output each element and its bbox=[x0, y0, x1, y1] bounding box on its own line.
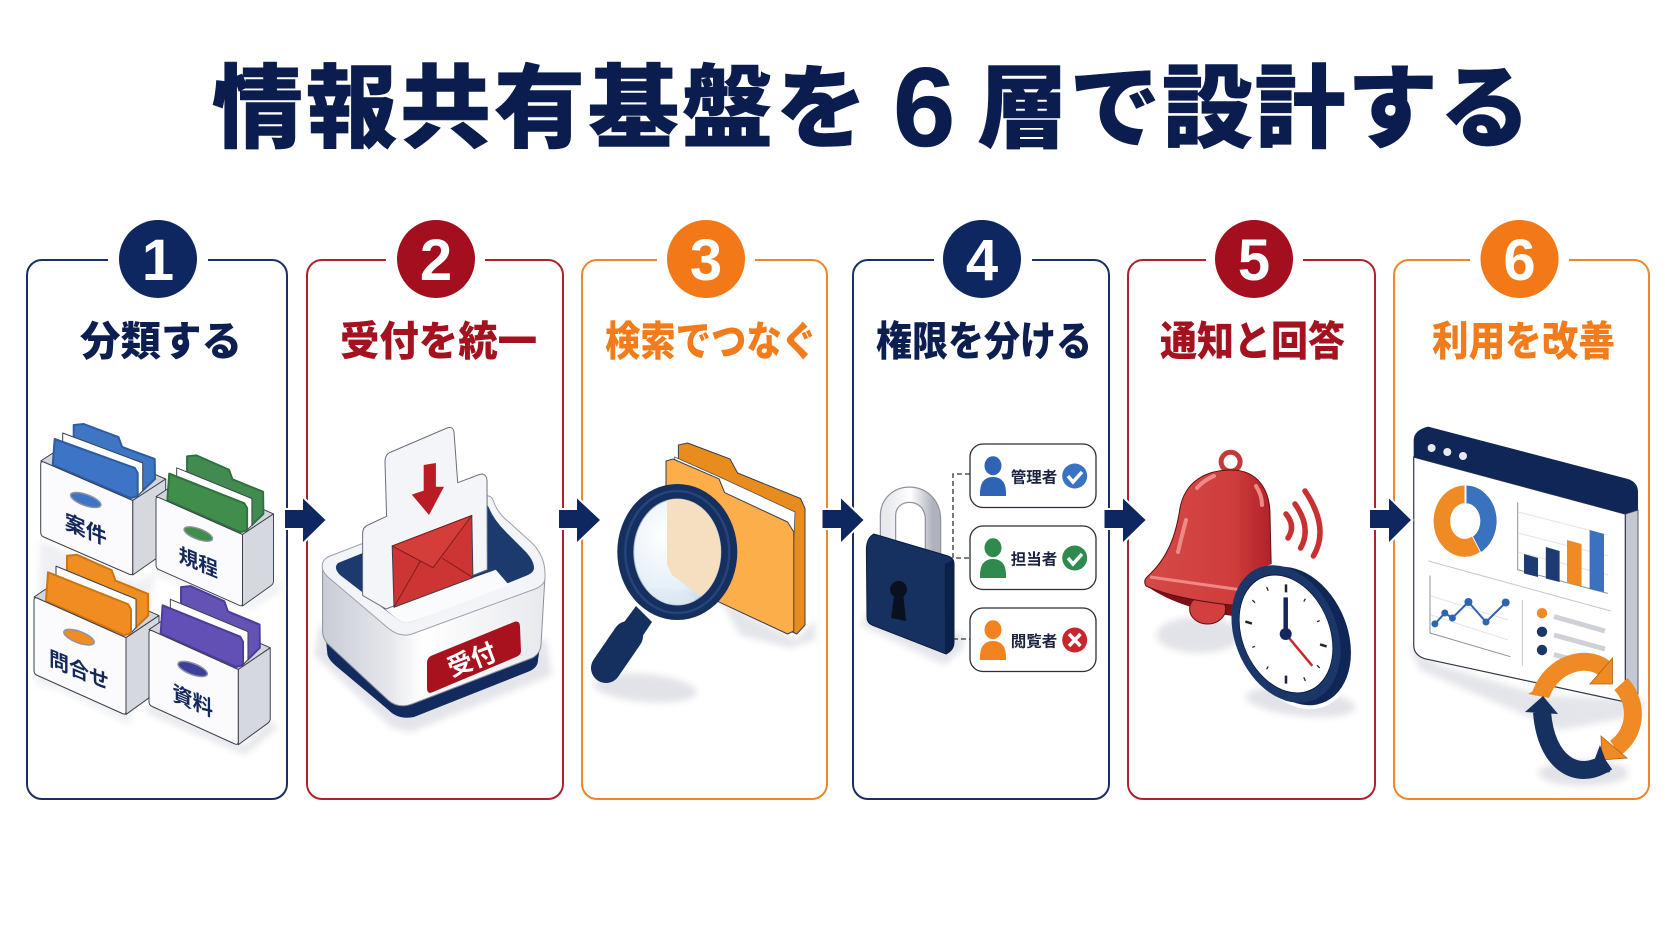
icon: down arrow bbox=[412, 463, 444, 515]
line chart bbox=[1430, 576, 1510, 657]
step number 6 bbox=[1480, 220, 1558, 298]
illustration: intake tray with envelope bbox=[314, 428, 552, 732]
step number 4: 4 bbox=[966, 228, 998, 293]
icon: cycle arrows bbox=[1525, 658, 1633, 777]
arrow: 1 to 2 bbox=[285, 498, 326, 542]
illustration: magnifier over folder bbox=[592, 443, 815, 706]
box: 規程 bbox=[156, 455, 274, 606]
icon: padlock bbox=[866, 495, 954, 654]
panel: step 3 search bbox=[582, 220, 827, 799]
icon: red envelope bbox=[392, 516, 473, 607]
card: viewer: 閲覧者 bbox=[1011, 633, 1057, 651]
panel: step 1 classify bbox=[27, 220, 287, 799]
panel: step 5 notify and answer bbox=[1128, 220, 1375, 799]
title: 6 bbox=[893, 45, 955, 170]
window dots bbox=[1428, 444, 1467, 460]
card: admin bbox=[970, 444, 1096, 508]
arrow: 3 to 4 bbox=[822, 498, 864, 542]
step number 2 bbox=[397, 220, 475, 298]
heading: classify: 分類する bbox=[80, 319, 242, 365]
icon: bell bbox=[1145, 452, 1272, 624]
arrow: 5 to 6 bbox=[1370, 498, 1411, 542]
step number 2: 2 bbox=[420, 228, 452, 293]
card: staff bbox=[970, 526, 1096, 590]
step number 3: 3 bbox=[690, 228, 722, 293]
panel: step 2 unify intake bbox=[307, 220, 563, 799]
box: 資料: 資料 bbox=[172, 680, 213, 722]
step number 1 bbox=[119, 220, 197, 298]
heading: notify and answer: 通知と回答 bbox=[1160, 319, 1345, 365]
label: 受付: 受付 bbox=[444, 638, 500, 683]
arrow: 4 to 5 bbox=[1104, 498, 1146, 542]
box: 規程: 規程 bbox=[179, 544, 218, 583]
panel: step 4 permissions bbox=[853, 220, 1109, 799]
illustration: padlock with roles bbox=[860, 444, 1096, 672]
box: 問合せ bbox=[34, 555, 159, 714]
box: 問合せ: 問合せ bbox=[49, 646, 109, 695]
card: admin: 管理者 bbox=[1011, 468, 1057, 487]
heading: separate permissions: 権限を分ける bbox=[876, 319, 1092, 365]
step number 5 bbox=[1215, 220, 1293, 298]
card: viewer bbox=[970, 608, 1096, 672]
box: 資料 bbox=[149, 586, 270, 745]
step number 3 bbox=[667, 220, 745, 298]
bar chart bbox=[1518, 502, 1608, 593]
window frame bbox=[1625, 510, 1638, 702]
icon: clock bbox=[1231, 547, 1354, 725]
card: staff: 担当者 bbox=[1011, 551, 1057, 569]
title: 層で設計する bbox=[977, 59, 1532, 160]
label: 受付 bbox=[427, 622, 521, 693]
heading: connect via search: 検索でつなぐ bbox=[605, 319, 817, 365]
heading: unify intake: 受付を統一 bbox=[340, 319, 537, 365]
step number 5: 5 bbox=[1238, 228, 1270, 293]
box: 案件: 案件 bbox=[65, 509, 107, 550]
illustration: four file boxes bbox=[34, 424, 282, 755]
illustration: dashboard window with cycle bbox=[1408, 427, 1645, 786]
step number 6: 6 bbox=[1503, 228, 1536, 293]
legend bbox=[1537, 608, 1605, 660]
heading: improve usage: 利用を改善 bbox=[1432, 319, 1615, 365]
title: 情報共有基盤を bbox=[212, 59, 870, 160]
icon: magnifying glass bbox=[606, 480, 760, 668]
arrow: 2 to 3 bbox=[559, 498, 600, 542]
illustration: bell and clock bbox=[1145, 452, 1357, 725]
donut chart bbox=[1434, 486, 1497, 557]
icon: sound waves bbox=[1286, 491, 1320, 556]
step number 4 bbox=[943, 220, 1021, 298]
panel: step 6 improve usage bbox=[1394, 220, 1649, 799]
box: 案件 bbox=[41, 424, 166, 575]
step number 1: 1 bbox=[142, 228, 174, 293]
